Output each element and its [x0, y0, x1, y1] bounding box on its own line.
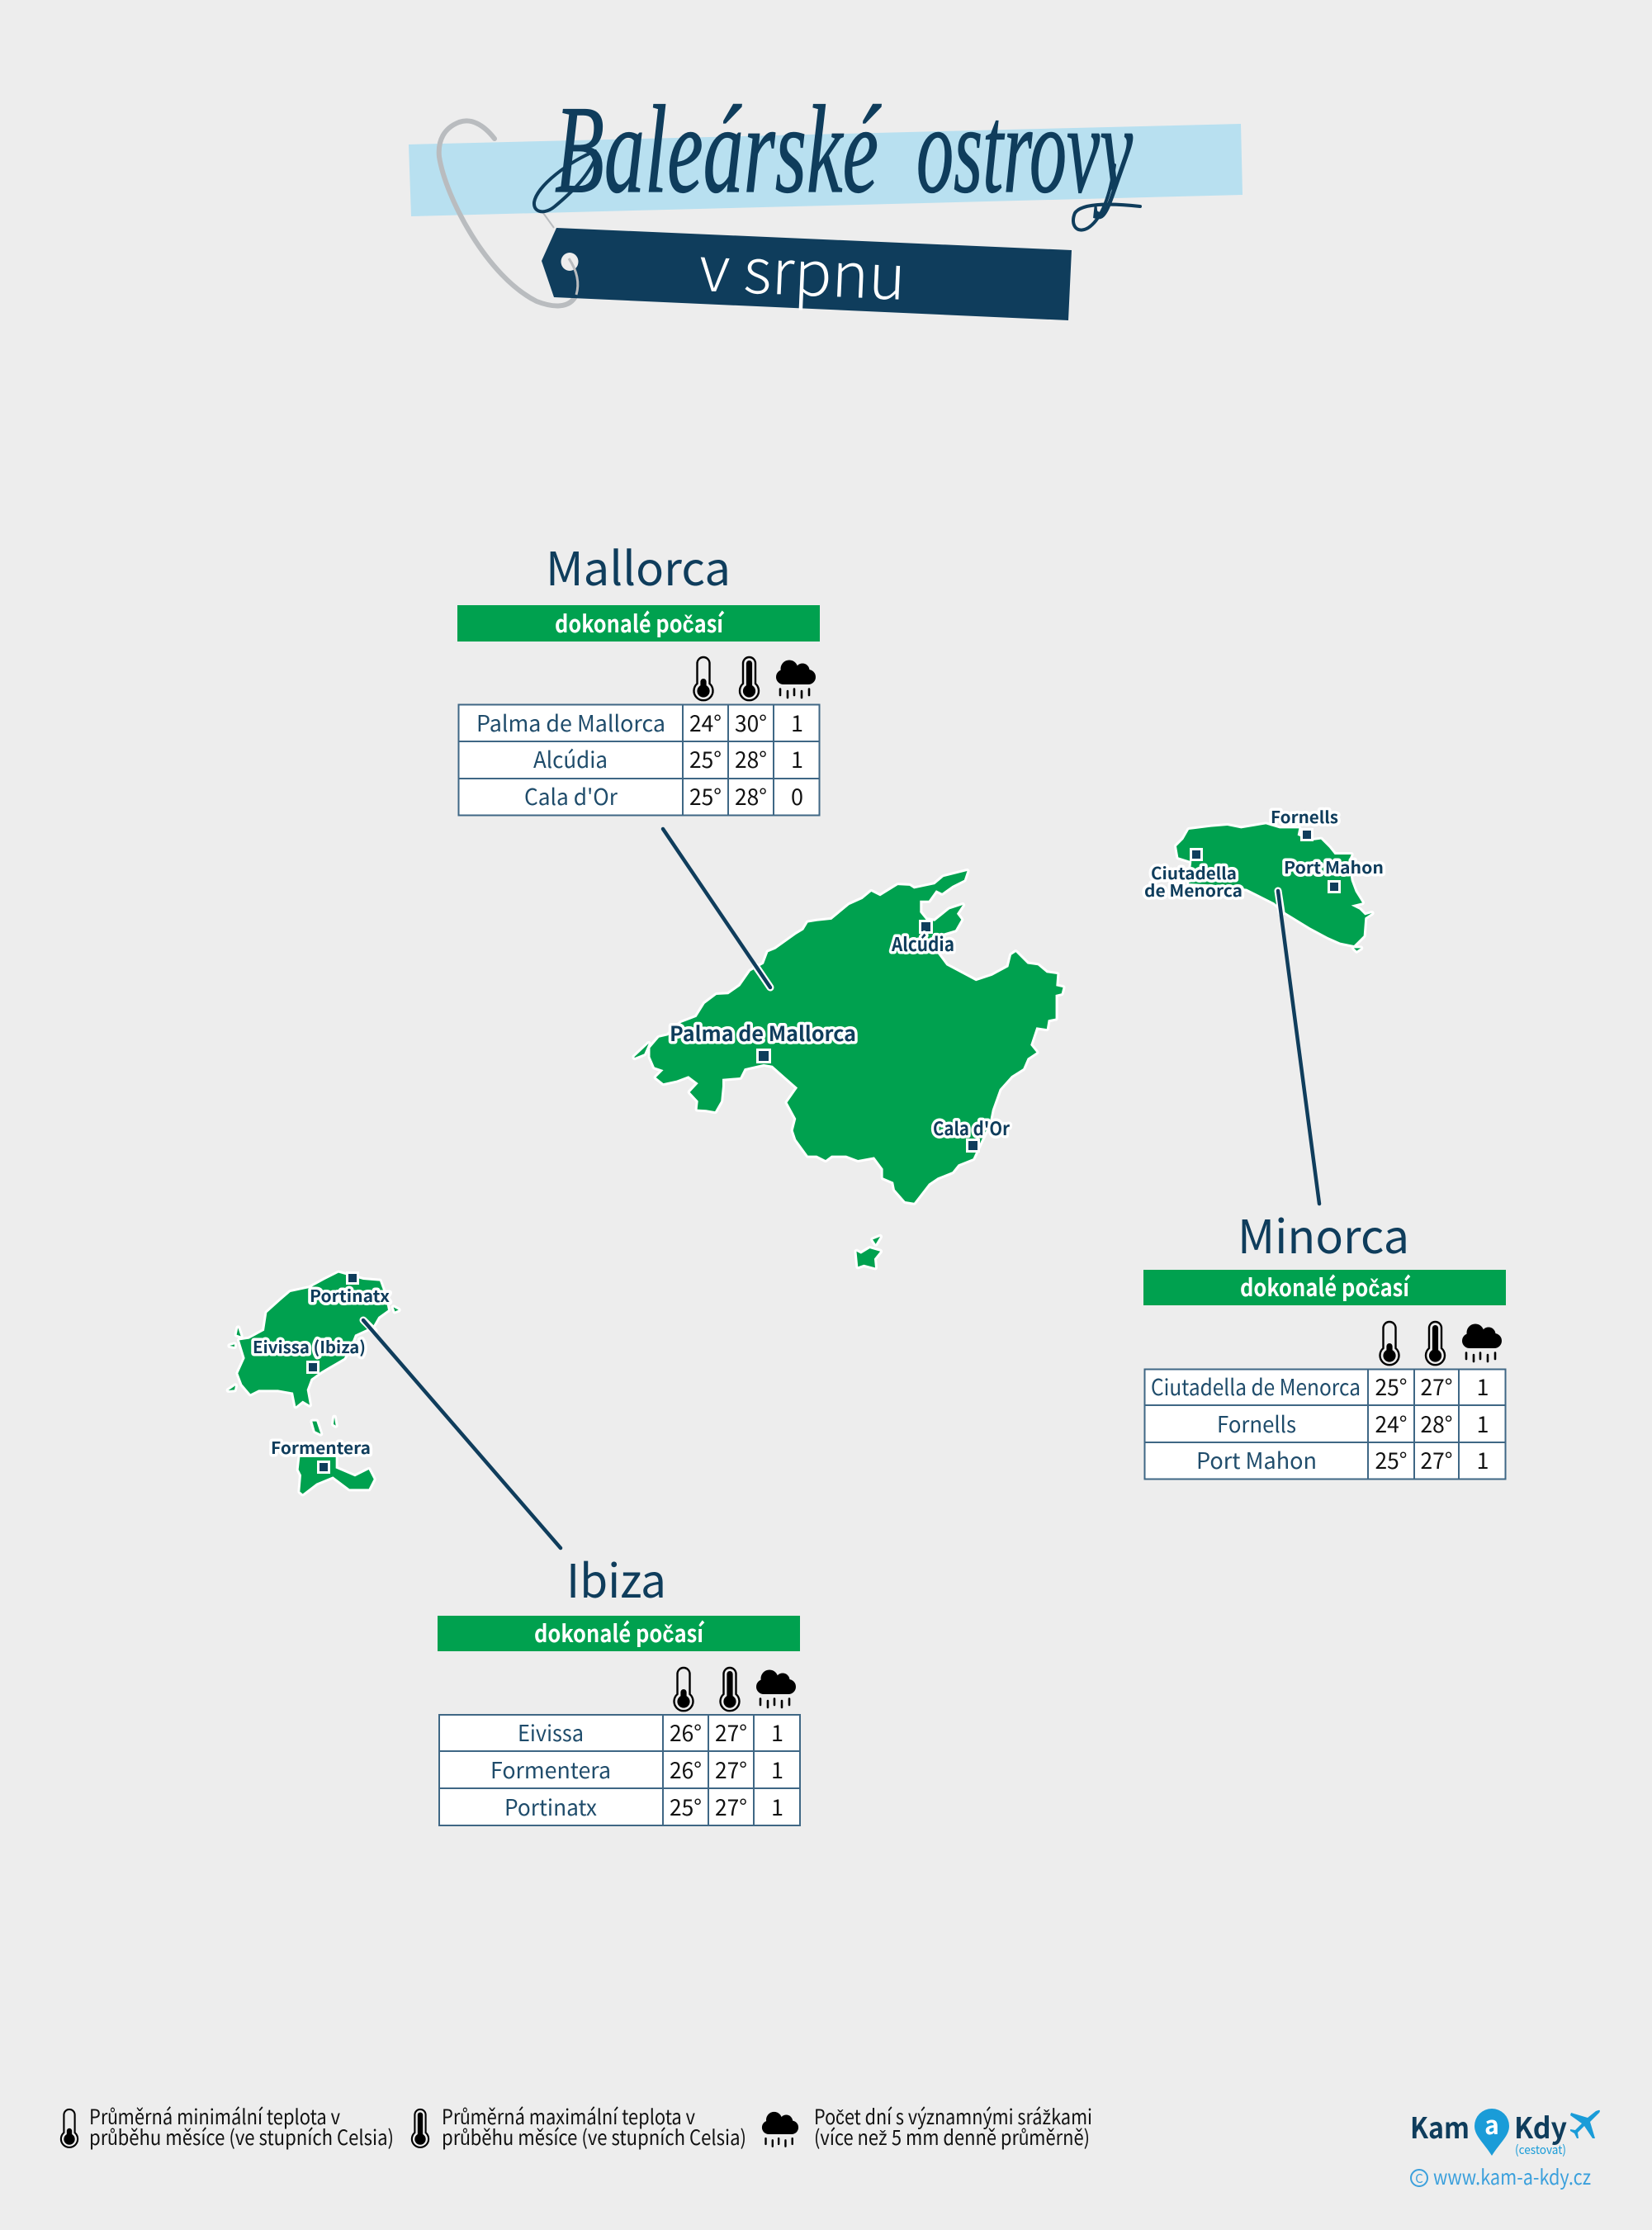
city label: Port Mahon: Port Mahon	[1284, 855, 1384, 878]
legend icon: rain	[762, 2112, 798, 2147]
tag string	[439, 121, 577, 305]
string over tag	[543, 213, 578, 295]
legend text: rain: Počet dní s významnými srážkami	[814, 2101, 1092, 2131]
table: Mallorca: 1	[791, 742, 803, 774]
city label: Ciutadella de Menorca	[1144, 860, 1243, 902]
city marker: Formentera	[319, 1461, 329, 1473]
logo word: Kam: Kam	[1410, 2105, 1470, 2147]
legend text: max temperature	[442, 2101, 746, 2152]
subtitle: v srpnu	[698, 218, 908, 318]
table: Ibiza: 27°	[715, 1753, 747, 1785]
legend icon: max temperature	[412, 2109, 428, 2147]
panel: Ibiza	[438, 1545, 800, 1825]
panel: Minorca	[1143, 1200, 1506, 1480]
table: Minorca: 28°	[1420, 1407, 1453, 1439]
title block	[409, 80, 1243, 320]
heading: Mallorca: Mallorca	[546, 533, 731, 599]
table: Ibiza: 26°	[670, 1753, 702, 1785]
title text: ostrovy	[916, 80, 1133, 219]
heading: Minorca: Minorca	[1238, 1200, 1409, 1267]
table: Mallorca: Alcúdia	[533, 742, 608, 774]
rating bar: Ibiza	[438, 1616, 800, 1651]
map: Mallorca	[635, 829, 1063, 1267]
icon: max temperature	[1426, 1322, 1445, 1365]
city label: Eivissa (Ibiza): Eivissa (Ibiza)	[253, 1334, 366, 1358]
table: Ibiza: 27°	[715, 1716, 747, 1748]
table: Mallorca: Palma de Mallorca	[476, 706, 665, 738]
city label: Fornells: Fornells	[1271, 804, 1338, 828]
callout line: Ibiza	[363, 1320, 561, 1548]
logo word: Kdy: Kdy	[1514, 2105, 1567, 2147]
copyright mark	[1411, 2170, 1427, 2187]
legend text: min temperature	[89, 2101, 394, 2152]
heading: Ibiza: Ibiza	[566, 1545, 666, 1612]
legend text: max temperature: Průměrná maximální teplota v	[442, 2101, 695, 2131]
city marker: Portinatx	[347, 1273, 358, 1283]
table: Ibiza: Eivissa	[518, 1716, 584, 1748]
icon: min temperature	[1380, 1322, 1399, 1365]
table: Ibiza: 1	[771, 1790, 783, 1822]
table: Minorca	[1144, 1369, 1506, 1480]
rating text: Ibiza: dokonalé počasí	[534, 1615, 705, 1650]
table: Mallorca	[459, 705, 820, 816]
table: Minorca: 1	[1476, 1443, 1489, 1475]
icon: max temperature	[740, 657, 759, 700]
city marker: Alcúdia	[920, 921, 931, 933]
logo tagline: (cestovat)	[1515, 2141, 1566, 2158]
logo: Kam a Kdy	[1410, 2105, 1600, 2191]
icon: rain	[776, 660, 816, 698]
legend icon: min temperature	[61, 2109, 78, 2147]
legend text: rain	[814, 2101, 1092, 2152]
table: Minorca: 25°	[1375, 1370, 1407, 1402]
table: Ibiza: Formentera	[490, 1753, 611, 1785]
icon: rain	[1462, 1324, 1502, 1361]
island shape: Mallorca	[635, 871, 1063, 1267]
legend text: max temperature: průběhu měsíce (ve stupních Celsia)	[442, 2122, 746, 2152]
table: Minorca: 1	[1476, 1370, 1489, 1402]
table: Ibiza: 27°	[715, 1790, 747, 1822]
logo pin	[1474, 2109, 1509, 2156]
table: Mallorca: 25°	[689, 742, 722, 774]
table: Ibiza: 26°	[670, 1716, 702, 1748]
table: Minorca: Fornells	[1217, 1407, 1296, 1439]
legend	[61, 2101, 1092, 2152]
city marker: Ciutadella de Menorca	[1190, 849, 1202, 860]
icon: min temperature	[674, 1668, 693, 1711]
table: Minorca: Ciutadella de Menorca	[1151, 1370, 1361, 1402]
table: Ibiza	[439, 1715, 800, 1825]
icon: rain	[756, 1669, 796, 1707]
island shape: Minorca	[1176, 824, 1372, 951]
table: Mallorca: 30°	[735, 706, 767, 738]
city label: Portinatx: Portinatx	[310, 1283, 390, 1307]
table: Mallorca: 25°	[689, 779, 722, 812]
city marker: Eivissa	[307, 1362, 319, 1372]
table: Minorca: 27°	[1420, 1370, 1453, 1402]
city label: Ciutadella de Menorca: de Menorca	[1144, 878, 1243, 902]
table: Mallorca: 28°	[735, 779, 767, 812]
table: Ibiza: Portinatx	[504, 1790, 598, 1822]
callout line: Minorca	[1278, 891, 1319, 1204]
table: Minorca: 24°	[1375, 1407, 1407, 1439]
icon: max temperature	[720, 1668, 740, 1711]
legend text: min temperature: průběhu měsíce (ve stupních Celsia)	[89, 2122, 394, 2152]
island shapes: Ibiza	[229, 1273, 399, 1494]
table: Ibiza: 1	[771, 1753, 783, 1785]
price tag	[542, 228, 1072, 320]
city label: Alcúdia: Alcúdia	[891, 929, 954, 957]
table: Ibiza: 1	[771, 1716, 783, 1748]
table: Minorca: Port Mahon	[1196, 1443, 1317, 1475]
title ribbon	[409, 124, 1243, 216]
map: Ibiza and Formentera	[229, 1273, 561, 1548]
legend text: min temperature: Průměrná minimální teplota v	[89, 2101, 340, 2131]
title text: Baleárské	[555, 80, 882, 219]
city marker: Fornells	[1301, 829, 1313, 840]
website: www.kam-a-kdy.cz	[1433, 2161, 1591, 2191]
rating text: Minorca: dokonalé počasí	[1240, 1269, 1411, 1304]
icon: airplane	[1570, 2110, 1600, 2138]
city label: Palma de Mallorca: Palma de Mallorca	[670, 1018, 856, 1048]
logo pin letter: a	[1484, 2105, 1499, 2142]
rating bar: Minorca	[1143, 1270, 1506, 1305]
city marker: Cala d'Or	[968, 1139, 979, 1151]
table: Mallorca: 0	[791, 779, 803, 812]
table: Mallorca: Cala d'Or	[524, 779, 618, 812]
callout line: Mallorca	[663, 829, 770, 987]
table: Mallorca: 24°	[689, 706, 722, 738]
panel: Mallorca	[457, 533, 820, 816]
city label: Ciutadella de Menorca: Ciutadella	[1151, 860, 1237, 884]
table: Minorca: 25°	[1375, 1443, 1407, 1475]
legend text: rain: (více než 5 mm denně průměrně)	[814, 2122, 1090, 2152]
table: Ibiza: 25°	[670, 1790, 702, 1822]
map: Minorca	[1144, 804, 1384, 1204]
table: Mallorca: 28°	[735, 742, 767, 774]
table: Mallorca: 1	[791, 706, 803, 738]
city label: Formentera: Formentera	[271, 1435, 371, 1459]
tag hole	[561, 253, 578, 271]
rating text: Mallorca: dokonalé počasí	[555, 605, 725, 640]
table: Minorca: 1	[1476, 1407, 1489, 1439]
copyright mark: C	[1415, 2170, 1423, 2187]
city marker: Palma de Mallorca	[758, 1050, 769, 1062]
city label: Cala d'Or: Cala d'Or	[933, 1115, 1010, 1141]
city marker: Port Mahon	[1329, 882, 1339, 892]
table: Minorca: 27°	[1420, 1443, 1453, 1475]
rating bar: Mallorca	[457, 605, 820, 642]
icon: min temperature	[693, 657, 713, 700]
